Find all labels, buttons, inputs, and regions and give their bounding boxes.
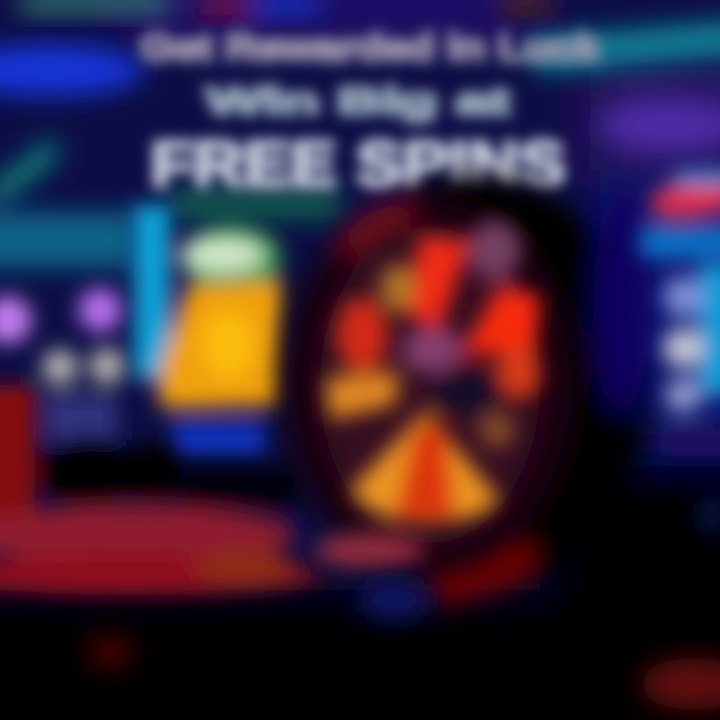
title: [140, 27, 601, 200]
right figure lights: [663, 277, 703, 317]
machine yellow body: [158, 280, 282, 408]
title line 2: Win Big at: [206, 81, 511, 123]
prize wheel: [282, 177, 650, 595]
right side machine: [640, 170, 720, 456]
figures and floor: [0, 288, 320, 595]
slot machine: [134, 205, 282, 456]
title line 3: FREE SPINS: [150, 128, 566, 200]
figure bodies: [45, 395, 117, 441]
machine blue base: [172, 420, 264, 456]
grey lights: [42, 349, 78, 385]
neon ceiling bands: [0, 19, 720, 268]
wheel segments: [315, 220, 540, 568]
cyan panel: [640, 226, 720, 258]
bottom glows: [86, 497, 720, 710]
machine cyan column: [134, 205, 170, 380]
red neon sign: [646, 170, 720, 224]
red carpet: [0, 505, 295, 565]
purple lights: [0, 296, 32, 344]
title line 1: Get Rewarded in Luck: [140, 27, 601, 69]
top-edge lights: [20, 0, 550, 16]
wheel rim: [282, 177, 650, 595]
machine green top: [182, 224, 282, 292]
